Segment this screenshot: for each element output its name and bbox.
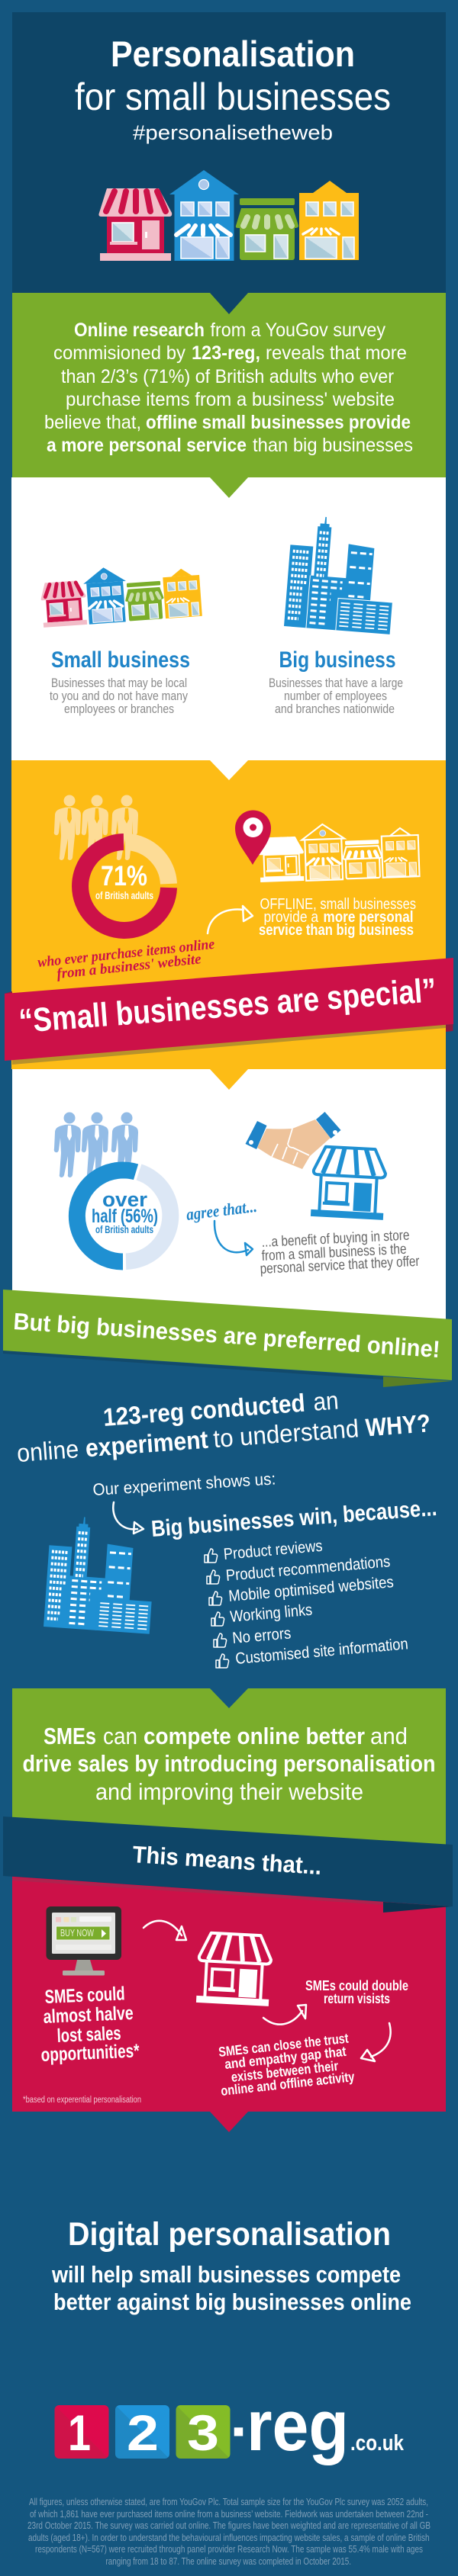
list: reasons big businesses win (205, 1537, 409, 1668)
list item: customised site information: Customised site information (234, 1635, 409, 1668)
logo: 123-reg.co.uk (55, 2385, 405, 2465)
heading: experiment: online (16, 1434, 79, 1467)
intro text: commisioned by (53, 342, 185, 364)
arrow (263, 2005, 306, 2025)
panel: 71% statistic (5, 760, 453, 1069)
small business description (50, 676, 188, 716)
big business description: and branches nationwide (275, 702, 395, 716)
list item: no errors: No errors (231, 1624, 292, 1647)
offline text: OFFLINE, small businesses (260, 896, 416, 913)
text: trust and empathy gap: SMEs can close the trust (218, 2031, 349, 2060)
heading: experiment (16, 1386, 431, 1467)
panel: title (12, 12, 446, 293)
donut chart: 71% (80, 842, 169, 930)
icon: city buildings (44, 1514, 157, 1634)
text: trust and empathy gap (218, 2031, 355, 2099)
icon: white outlined shops (258, 821, 420, 882)
heading: small business: Small business (51, 647, 190, 673)
panel: over half statistic (12, 1069, 446, 1323)
heading: experiment: 123-reg conducted (102, 1389, 306, 1431)
text: trust and empathy gap: exists between their (231, 2058, 339, 2085)
small business description: to you and do not have many (50, 689, 188, 703)
text: SMEs could almost halve: almost halve (43, 2003, 134, 2028)
icon: map pin (235, 810, 271, 865)
intro text: believe that, (44, 412, 141, 433)
handwritten note: who ever purchase items online (37, 936, 216, 971)
text: SMEs could double: return visists (324, 1991, 390, 2006)
icon: small shops (39, 561, 202, 628)
intro text: than big businesses (253, 435, 413, 456)
button label: BUY NOW (60, 1927, 95, 1938)
logo: 123-reg.co.uk: - (233, 2385, 244, 2465)
arrow (208, 906, 253, 933)
intro text: Online research (74, 320, 205, 341)
ribbon: this means that: This means that... (132, 1841, 322, 1880)
donut chart: 71%: of British adults (95, 889, 153, 901)
arrow (144, 1921, 186, 1940)
logo: 123-reg.co.uk: reg (247, 2385, 349, 2465)
text: SMEs could double: SMEs could double (305, 1978, 408, 1993)
text: SMEs could almost halve: SMEs could (44, 1983, 125, 2008)
panel: online research intro (12, 293, 446, 498)
intro text: a more personal service (47, 435, 247, 456)
icon: big city buildings (284, 514, 398, 634)
heading: big business: Big business (279, 647, 395, 673)
closing statement: will help small businesses compete (51, 2261, 401, 2288)
icon: handshake (246, 1112, 340, 1169)
icon: computer monitor (46, 1906, 121, 1975)
ribbon: this means that (3, 1816, 453, 1913)
donut chart: 71%: 71% (101, 860, 147, 891)
panel: SME opportunities (3, 1816, 453, 2132)
SME text (23, 1723, 435, 1805)
closing statement: better against big businesses online (53, 2289, 411, 2315)
benefit text (260, 1228, 421, 1277)
heading: experiment: to understand (212, 1414, 360, 1453)
big business description: Businesses that have a large (269, 676, 403, 690)
SME text: and improving their website (95, 1778, 363, 1805)
donut chart: 56%: half (56%) (92, 1206, 158, 1227)
title: Personalisation (111, 34, 355, 74)
heading: experiment: WHY? (365, 1408, 431, 1441)
SME text: and (370, 1723, 408, 1749)
arrow (214, 1221, 253, 1255)
footnote: methodology (27, 2497, 431, 2567)
big business description: number of employees (284, 689, 387, 703)
SME text: compete online better (144, 1723, 365, 1749)
heading: experiment: an (312, 1386, 340, 1416)
panel: small vs big business (11, 477, 446, 760)
closing statement: Digital personalisation (68, 2216, 391, 2253)
icon: three people blue (54, 1112, 138, 1177)
intro text: offline small businesses provide (146, 412, 411, 433)
icon: white outlined shop (196, 1932, 273, 2006)
footnote: methodology: ranging from 18 to 87. The online survey was completed in October 2015. (105, 2556, 351, 2567)
donut chart: 56%: of British adults (95, 1224, 153, 1235)
SME text: SMEs (44, 1723, 96, 1749)
logo: 123-reg.co.uk: 1 (68, 2404, 91, 2461)
icon: row of shops (98, 170, 359, 261)
heading: experiment: experiment (85, 1425, 209, 1462)
ribbon: small businesses are special (5, 958, 453, 1065)
offline text: service than big business (259, 922, 414, 939)
SME text: can (103, 1723, 137, 1749)
hashtag: #personalisetheweb (133, 121, 333, 144)
text: SMEs could almost halve: lost sales (56, 2022, 121, 2047)
offline text: provide a (264, 909, 319, 926)
icon: three people (54, 795, 138, 860)
benefit text: from a small business is the (261, 1241, 407, 1264)
subtitle: for small businesses (75, 75, 391, 118)
donut chart: 56%: over (102, 1188, 147, 1211)
ribbon: big businesses preferred online: But big businesses are preferred online! (13, 1308, 441, 1363)
offline text (259, 896, 416, 939)
ribbon: big businesses preferred online (3, 1290, 452, 1387)
list item: no errors (214, 1624, 292, 1647)
arrow (113, 1502, 144, 1534)
benefit text: ...a benefit of buying in store (261, 1228, 410, 1251)
arrow (361, 2023, 391, 2061)
text: trust and empathy gap: and empathy gap that (224, 2044, 347, 2072)
intro text: than 2/3’s (71%) of British adults who ever (61, 366, 394, 387)
intro text: from a YouGov survey (211, 320, 385, 341)
intro text: reveals that more (266, 342, 407, 364)
logo: 123-reg.co.uk: .co.uk (350, 2431, 405, 2456)
offline text: more personal (324, 909, 414, 926)
text: SMEs could almost halve: opportunities* (40, 2040, 140, 2066)
footnote: *based on experential personalisation (23, 2096, 141, 2105)
text: trust and empathy gap: online and offline activity (220, 2069, 355, 2099)
list item: mobile optimised websites: Mobile optimised websites (227, 1573, 395, 1605)
handwritten agree that: agree that... (185, 1196, 258, 1224)
small business description: Businesses that may be local (51, 676, 187, 690)
logo: 123-reg.co.uk: 3 (187, 2404, 219, 2461)
text: SMEs could double (305, 1978, 408, 2006)
logo: 123-reg.co.uk: 2 (127, 2404, 159, 2461)
icon: blue outlined shop (311, 1146, 387, 1220)
list item: product recommendations: Product recommendations (225, 1553, 391, 1585)
list item: working links: Working links (229, 1601, 313, 1626)
small business description: employees or branches (64, 702, 174, 716)
donut chart: 56% (77, 1171, 170, 1262)
text: our experiment shows us: Our experiment shows us: (92, 1469, 276, 1499)
intro text: 123-reg, (192, 342, 260, 364)
intro text: purchase items from a business' website (66, 389, 395, 410)
panel: SMEs can compete (12, 1688, 446, 1849)
big business description (269, 676, 403, 716)
closing statement (51, 2216, 411, 2315)
intro text (44, 320, 413, 456)
benefit text: personal service that they offer (260, 1254, 421, 1277)
text: SMEs could almost halve (40, 1983, 140, 2066)
handwritten note: from a business' website (56, 951, 202, 982)
list item: product reviews: Product reviews (223, 1537, 323, 1563)
